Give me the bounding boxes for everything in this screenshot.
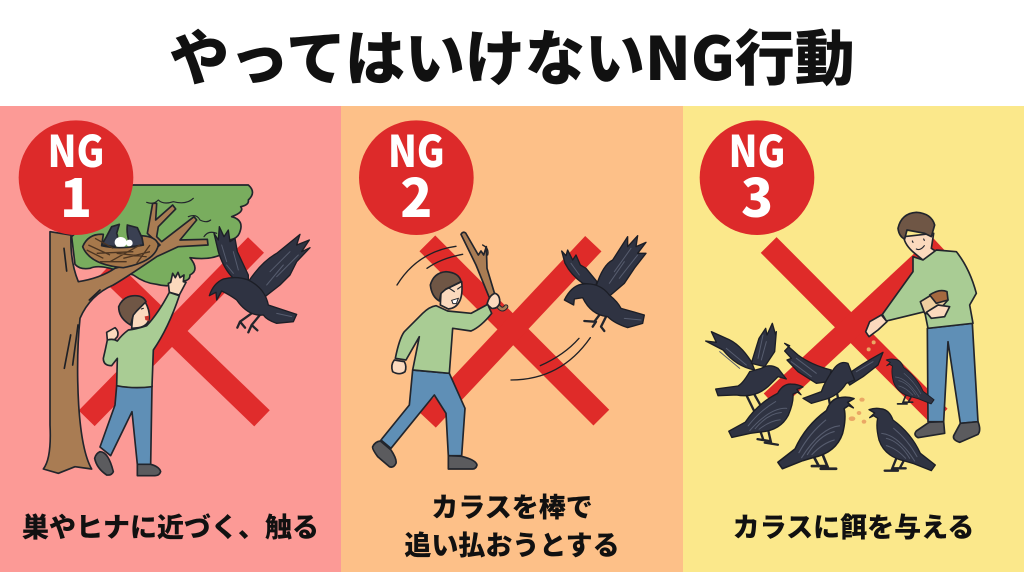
NG 1 badge: NG xyxy=(48,118,104,180)
NG 1 badge xyxy=(19,118,133,235)
crow flying left xyxy=(706,323,786,410)
panel: NG 2 xyxy=(341,106,683,572)
motion lines xyxy=(397,245,590,380)
icon: tree with foliage xyxy=(43,185,253,473)
icon: crow flying xyxy=(562,236,646,331)
caption: カラスに餌を与える xyxy=(733,506,974,545)
crow standing right xyxy=(869,408,935,471)
person swinging stick xyxy=(373,272,500,469)
caption: カラスを棒で xyxy=(431,486,593,525)
icon: nest with chicks and eggs xyxy=(83,224,158,268)
NG 1 badge: 1 xyxy=(60,157,92,233)
NG 3 badge xyxy=(700,118,814,235)
icon: crow flying xyxy=(209,227,310,332)
person feeding crows xyxy=(849,212,980,442)
crow standing behind xyxy=(886,359,934,404)
red X mark xyxy=(769,245,940,417)
NG 3 badge: 3 xyxy=(741,157,773,233)
caption xyxy=(404,486,620,563)
NG 3 badge: NG xyxy=(729,118,785,180)
NG 2 badge xyxy=(359,118,474,235)
red X mark xyxy=(87,245,262,418)
NG 2 badge: NG xyxy=(388,118,445,180)
title: やってはいけないNG行動 xyxy=(169,11,855,98)
NG 2 badge: 2 xyxy=(400,157,432,233)
panel: NG 3 xyxy=(683,106,1024,572)
crow standing left xyxy=(728,375,803,447)
red X mark xyxy=(427,243,601,420)
crow flying centre xyxy=(785,343,883,403)
person reaching toward nest xyxy=(95,272,186,476)
crow standing centre xyxy=(778,397,854,469)
caption: 追い払おうとする xyxy=(404,524,620,563)
panel: NG 1 xyxy=(0,106,341,572)
caption: 巣やヒナに近づく、触る xyxy=(22,506,319,545)
icon: stick xyxy=(461,232,506,309)
